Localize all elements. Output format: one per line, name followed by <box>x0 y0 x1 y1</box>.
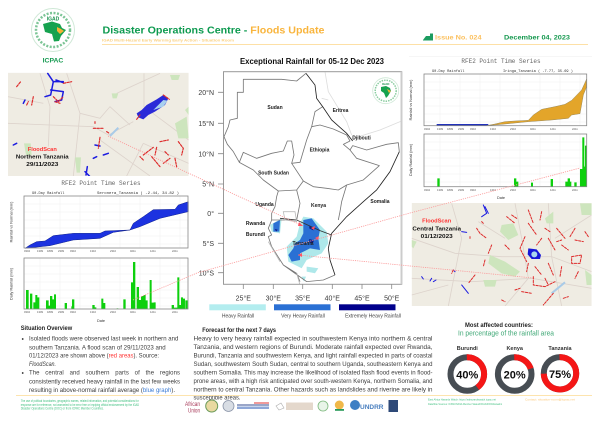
latitude axis labels: 0° <box>207 210 214 218</box>
chart: daily rainfall: Daily Rainfall (mm) <box>10 267 14 300</box>
text block: forecast: Heavy to very heavy rainfall expected in southwestern Kenya into northern & central <box>194 337 432 343</box>
chart: rainfall vs normal: 1310 <box>90 249 96 253</box>
country borders <box>224 72 402 285</box>
text block: situation overview: FloodScan. <box>29 362 56 368</box>
axis label: date: Date <box>97 319 105 323</box>
chart: daily rainfall: 1309 <box>37 310 43 314</box>
text block: situation overview: The central and southern parts of the regions <box>29 371 180 377</box>
partner logos: Union <box>188 408 200 414</box>
chart: rainfall vs normal: 2310 <box>510 127 516 131</box>
country labels: Kenya <box>311 203 326 209</box>
chart: rainfall vs normal <box>10 196 188 253</box>
country labels: Burundi <box>246 232 266 238</box>
map caption: Northern Tanzania: Northern Tanzania <box>16 154 69 160</box>
text block: forecast: northern to central Tanzania. Other hazards such as landslides and riverine are likely in <box>194 387 432 393</box>
text block: situation overview: consistently received heavy rainfall in the last few weeks <box>29 379 180 385</box>
text block: situation overview: 01/12/2023 are shown above (red areas). Source: <box>29 354 159 360</box>
donut: Burundi: 40% <box>456 370 479 382</box>
panel: central Tanzania flood map <box>412 203 592 306</box>
chart: daily rainfall: 0211 <box>130 310 136 314</box>
footer links <box>428 397 575 406</box>
chart: daily rainfall: 1211 <box>550 188 556 192</box>
latitude axis labels: 10°S <box>199 269 214 277</box>
map logo <box>373 78 399 104</box>
logo: IGAD ICPAC <box>32 8 74 64</box>
chart title: RFE2 Point Time Series <box>461 58 541 65</box>
text block: forecast: Burundi, Tanzania and southwestern Kenya, and light rainfall expected in parts of coastal <box>194 353 432 359</box>
heading: most affected countries: Most affected countries: <box>465 322 533 329</box>
country labels: Sudan <box>267 105 283 111</box>
logo: IGAD ICPAC: IGAD <box>47 16 60 22</box>
footer links: Data/Site Sources: ICPAC/NASA Member States/NOAA/IFRC/Eswatini <box>428 402 502 406</box>
chart: daily rainfall: 2309 <box>58 310 64 314</box>
disclaimer: Disaster Operations Centre (DOC) or from ICPAC Member Countries. <box>21 406 104 410</box>
chart: daily rainfall <box>409 134 587 192</box>
latitude axis labels: 5°S <box>203 240 214 248</box>
text block: forecast: Forecast for the next 7 days <box>202 328 277 334</box>
header title: Disaster Operations Centre - Floods Update <box>102 24 325 36</box>
country labels: Somalia <box>370 199 390 205</box>
map title: Exceptional Rainfall for 05-12 Dec 2023 <box>240 57 385 66</box>
chart: daily rainfall: 2310 <box>510 188 516 192</box>
chart subtitle: 90-Day Rainfall <box>32 191 64 196</box>
disclaimer <box>21 399 140 410</box>
header title <box>102 24 325 42</box>
text block: situation overview: resulting in above-normal rainfall average (blue graph). <box>29 388 175 394</box>
text block: forecast: Sudan, southwestern South Sudan, central to southern Uganda, southeastern Kenya and <box>194 362 432 368</box>
longitude axis labels <box>236 294 400 302</box>
map caption: Central Tanzania <box>412 218 461 240</box>
chart subtitle: 90-Day Rainfall <box>432 69 464 74</box>
chart: daily rainfall: 2310 <box>110 310 116 314</box>
chart: rainfall vs normal: 1809 <box>47 249 53 253</box>
station label: Seronera_Tanzania ( -2.44, 34.82 ) <box>97 191 179 196</box>
logo: IGAD ICPAC: ICPAC <box>43 58 63 64</box>
chart: daily rainfall: 0211 <box>530 188 536 192</box>
chart: rainfall vs normal: 0310 <box>70 249 76 253</box>
map caption: Northern Tanzania: FloodScan <box>28 147 57 153</box>
text block: situation overview <box>21 325 180 394</box>
country labels: Djibouti <box>352 136 371 142</box>
chart: daily rainfall: 1809 <box>47 310 53 314</box>
map caption: Central Tanzania: FloodScan <box>422 218 451 224</box>
panel: rainfall time series Iringa <box>409 58 587 200</box>
text block: situation overview: Situation Overview <box>21 325 73 332</box>
map caption: Central Tanzania: Central Tanzania <box>412 226 461 232</box>
station label: Iringa_Tanzania ( -7.77, 35.69 ) <box>503 69 573 74</box>
panel: left rainfall time series <box>10 180 188 323</box>
chart: rainfall vs normal: 1309 <box>437 127 443 131</box>
longitude axis labels: 25°E <box>236 294 251 302</box>
chart: rainfall vs normal: 0304 <box>24 249 30 253</box>
text block: forecast: prone areas, with a high risk anticipated over south-western Kenya, northern Somalia, and <box>194 379 432 385</box>
panel: northern Tanzania flood map <box>8 73 189 177</box>
latitude axis labels: 15°N <box>198 120 214 128</box>
latitude axis labels: 10°N <box>198 150 214 158</box>
donut: Tanzania <box>544 346 576 390</box>
chart: rainfall vs normal: 0310 <box>470 127 476 131</box>
chart: rainfall vs normal: 2309 <box>58 249 64 253</box>
donut: Kenya: 20% <box>504 370 526 382</box>
chart: rainfall vs normal: 2309 <box>458 127 464 131</box>
chart: daily rainfall: 1310 <box>490 188 496 192</box>
chart: rainfall vs normal: Rainfall vs Normal (mm) <box>10 201 14 242</box>
text block: forecast <box>194 328 433 401</box>
chart: rainfall vs normal: 1309 <box>37 249 43 253</box>
chart: daily rainfall: 2309 <box>458 188 464 192</box>
country labels: South Sudan <box>258 170 289 176</box>
disclaimer: response are for reference, not warranted to be error free or implying official endorsement by the IGAD <box>21 403 140 407</box>
chart: rainfall vs normal: 0304 <box>424 127 430 131</box>
chart: daily rainfall: 2211 <box>172 310 178 314</box>
heading: most affected countries: In percentage of the rainfall area <box>458 330 554 338</box>
panel: exceptional rainfall map <box>198 72 402 302</box>
longitude axis labels: 45°E <box>354 294 370 302</box>
donut: Tanzania: 75% <box>549 369 571 381</box>
chart: rainfall vs normal <box>409 74 587 131</box>
country labels: Eritrea <box>333 108 349 114</box>
chart: rainfall vs normal: 2310 <box>110 249 116 253</box>
date: December 04, 2023 <box>504 34 570 41</box>
chart: rainfall vs normal: 1211 <box>550 127 556 131</box>
longitude axis labels: 30°E <box>266 294 281 302</box>
chart: daily rainfall: 1310 <box>90 310 96 314</box>
text block: situation overview: southern Tanzania. A flood scan of 29/11/2023 and <box>29 345 166 351</box>
heading: most affected countries <box>458 322 554 338</box>
chart: daily rainfall: 2211 <box>572 188 578 192</box>
country labels: Rwanda <box>246 221 265 227</box>
country labels: Uganda <box>255 202 274 208</box>
map caption: Northern Tanzania: 29/11/2023 <box>26 162 58 168</box>
chart: rainfall vs normal: 2211 <box>572 127 578 131</box>
map caption: Northern Tanzania <box>16 147 69 168</box>
rainfall: heavy, very heavy and extremely heavy areas <box>270 217 328 282</box>
chart: rainfall vs normal: 1310 <box>490 127 496 131</box>
donut: Kenya: Kenya <box>506 346 524 352</box>
chart: rainfall vs normal: 1211 <box>150 249 156 253</box>
text block: forecast: Tanzania, and western regions of Burundi. Moderate rainfall expected over Rwanda, <box>194 345 433 351</box>
partner logos: UNDRR <box>360 404 384 411</box>
map logo: IGAD <box>382 82 390 86</box>
legend: rainfall categories: Very Heavy Rainfall <box>281 313 325 319</box>
chart: daily rainfall: 0304 <box>24 310 30 314</box>
chart: rainfall vs normal: 0211 <box>130 249 136 253</box>
header title: IGAD Multi-Hazard Early Warning Early Action - Situation Room <box>102 38 234 42</box>
longitude axis labels: 50°E <box>384 294 400 302</box>
chart: daily rainfall: 1309 <box>437 188 443 192</box>
axis label: date: Date <box>497 196 505 200</box>
disclaimer: The use of political boundaries, geographic names, related information, and potential considerations for <box>21 399 139 403</box>
chart: rainfall vs normal: 2211 <box>172 249 178 253</box>
donut: Burundi <box>450 346 484 391</box>
footer links: East Africa Hazards Watch: https://eahazardswatch.icpac.net <box>428 397 496 401</box>
chart: rainfall vs normal: 0211 <box>530 127 536 131</box>
text block: forecast: southern Somalia. This may increase the likelihood of isolated flash flood events in flood- <box>194 370 433 376</box>
text block: situation overview: Isolated floods were observed last week in northern and <box>29 337 178 343</box>
donut: Burundi: Burundi <box>457 346 478 352</box>
latitude axis labels: 5°N <box>202 181 214 189</box>
text block: forecast: susceptible areas. <box>194 395 241 401</box>
longitude axis labels: 35°E <box>295 294 311 302</box>
chart: daily rainfall: 0304 <box>424 188 430 192</box>
latitude axis labels: 20°N <box>198 89 214 97</box>
donut: Kenya <box>498 346 532 391</box>
donut: Tanzania: Tanzania <box>548 346 572 352</box>
longitude axis labels: 40°E <box>325 294 340 302</box>
country labels: Tanzania <box>292 241 314 247</box>
chart: daily rainfall: 1211 <box>150 310 156 314</box>
country labels <box>246 105 390 247</box>
chart: rainfall vs normal: Rainfall vs Normal (mm) <box>409 79 413 120</box>
country labels: Ethiopia <box>310 148 330 154</box>
issue number: Issue No. 024 <box>435 34 482 41</box>
partner logos: African <box>185 401 200 408</box>
footer links: Contact: situation-room@icpac.net <box>525 397 575 401</box>
chart: daily rainfall <box>10 258 188 314</box>
legend: rainfall categories <box>209 304 401 319</box>
callout lines linking maps and charts <box>108 136 580 300</box>
chart: daily rainfall: 0310 <box>70 310 76 314</box>
chart: daily rainfall: 0310 <box>470 188 476 192</box>
map caption: Central Tanzania: 01/12/2023 <box>421 234 453 240</box>
icon: issue <box>423 34 433 40</box>
partner logos <box>185 400 398 414</box>
chart: daily rainfall: Daily Rainfall (mm) <box>409 143 413 176</box>
chart: rainfall vs normal: 1809 <box>447 127 453 131</box>
latitude axis labels <box>198 89 392 289</box>
chart: daily rainfall: 1809 <box>447 188 453 192</box>
legend: rainfall categories: Extremely Heavy Rainfall <box>345 313 401 319</box>
chart title: RFE2 Point Time Series <box>61 180 141 187</box>
legend: rainfall categories: Heavy Rainfall <box>222 313 254 319</box>
